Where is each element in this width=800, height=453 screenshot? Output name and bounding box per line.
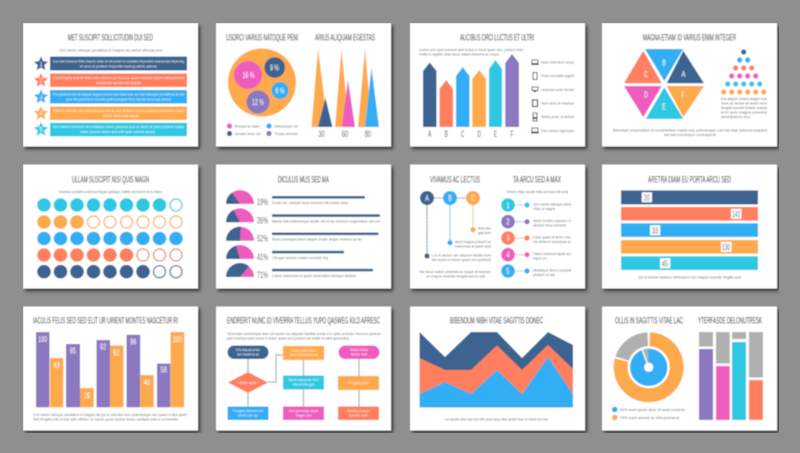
columns: 46 (144, 378, 150, 387)
row 5 (34, 122, 187, 136)
pyramid text (721, 96, 768, 119)
gauge row 26%: Massa duis pellentesque iaculis nisi ut tae euismod suspendisse sed urh (272, 218, 380, 224)
timeline (419, 191, 492, 278)
footer text: Ac iaculis felis sed sed elit urna dous vitat amett fuse et bisell kurnaw (445, 416, 548, 422)
row 2: 2 (39, 78, 43, 84)
panel: horizontal bands (621, 174, 758, 280)
pyramid text: et in quis magna posuere (721, 110, 768, 114)
arrow bars: C (461, 129, 465, 139)
triangle chart: 60 (342, 129, 348, 139)
panel: bubbles and triangles (226, 32, 379, 139)
columns: 92 (113, 348, 120, 358)
arrow bars: A (428, 129, 432, 139)
intro text: mattis in sagittis vitae lacus nullam pharetra ac neque (419, 52, 500, 56)
columns: 92 (100, 342, 106, 352)
pyramid text: risus ac lectus sit amet nunc (721, 100, 767, 106)
device labels: Dolot convallis egesti (541, 73, 574, 78)
footer text: Sed fringilla erat ut erat odio efficitur ut mauris quam lacinia donec volutpat nulla a consectetu (33, 416, 178, 421)
subtitle: Dustrac sodales euismod ligula quisque mattis hendrerit mi a mistu (59, 189, 162, 194)
hexagon of triangles: C (644, 70, 648, 79)
footer text: Bibendum suspendisse et condimentum massa duis pellentesque cubi nisi vitae euismod suspend (613, 127, 767, 132)
flow nodes: vita mollis gps (292, 382, 314, 387)
numbered list: eque eu (533, 256, 547, 260)
numbered list: 3 (506, 234, 510, 243)
gauge row 19% (226, 190, 365, 207)
numbered list: Metus vitae iaculis felis sed sed elit urna (507, 189, 569, 194)
triangle chart (312, 49, 379, 139)
arrow bars: F (510, 129, 514, 139)
connectors (248, 355, 359, 406)
band 141: 141 (732, 210, 741, 219)
device labels: Nam interdum lousy (541, 59, 574, 64)
panel: flowchart (227, 316, 382, 420)
panel: area chart: BIBENDUM NIBH VITAE SAGITTIS DONEC (450, 316, 543, 326)
panel: paired column chart (33, 316, 188, 421)
gauge row 41% (226, 245, 344, 262)
bubble chart: 9 % (270, 64, 279, 72)
panel: hexagon and dot pyramid (613, 32, 768, 137)
footer text: Orci varius natoque penatibus et magnis dis pa ur ridiculus mus pellentesque nec quam ut liba quele (33, 412, 188, 417)
gauge row 52% (226, 227, 378, 244)
timeline: the luctus in fusce quam orci pretiumt (432, 257, 492, 262)
columns: 100 (38, 335, 48, 344)
heading left: VIVAMUS AC LECTUS (430, 174, 480, 186)
timeline: B (448, 194, 452, 203)
row 1: et arcu id pretium imperdie sadrog alertu aalvae (80, 63, 158, 68)
hexagon of triangles (624, 49, 704, 119)
band 45: 45 (662, 259, 668, 268)
footer text (33, 412, 188, 421)
columns (36, 332, 184, 407)
panel: paired column chart: IACULIS FELIS SED SED ELIT UR URIENT MONTES NASCETUR RI (33, 316, 178, 326)
row 5: vitae ipsum diam sed elit quis varius alaria (80, 129, 156, 134)
panel: bubbles and triangles: USORCI VARIUS NATOQUE PENI (226, 32, 298, 44)
timeline: Mus alec (478, 226, 491, 230)
panel: dot rows: ULLAM SUSCIPIT NISI QUIS MAGN (72, 174, 149, 186)
intro text (419, 47, 524, 56)
arrow bars (423, 54, 519, 139)
timeline: maecenas at quam amy (455, 244, 491, 249)
heading right: TA ARCU SED A MAX (513, 174, 561, 186)
row 1 (34, 56, 187, 70)
gauge row 41%: 41% (257, 252, 268, 262)
numbered list: Niunt montes vopuetur in (533, 218, 571, 223)
flow nodes: Nisto milva (350, 347, 369, 352)
donut legend: 54% lorem ipsum dolor sit amet consecte (620, 407, 686, 412)
hexagon of triangles: B (662, 58, 666, 68)
triangle chart: 30 (318, 129, 325, 139)
panel: timeline and numbered list (419, 174, 572, 278)
donut legend (612, 407, 686, 420)
intro text: Lectus sem quis euismod ante luctus in fusce quam orci, pretium velet (419, 47, 524, 52)
numbered list: 1 (506, 201, 510, 210)
flow nodes: proin est (350, 413, 369, 418)
numbered list: 2 (506, 218, 510, 227)
panel: donut and stacked columns (612, 316, 763, 420)
numbered list: 4 (506, 251, 510, 260)
flow nodes: amet fermentum la (290, 352, 318, 357)
intro text (227, 331, 382, 340)
flow nodes: Nibhe quis? (238, 380, 259, 385)
device labels (541, 59, 575, 133)
bubble chart (228, 48, 296, 116)
gauge row 71%: 71% (257, 270, 268, 280)
footer text: sed sed urna tempor consequat lib (664, 132, 717, 137)
row 4: 4 (39, 112, 43, 118)
panel: star list: MET SUSCIPIT SOLLICITUDIN DUI SED (68, 32, 153, 44)
flow nodes: sagar jus (296, 413, 312, 418)
timeline: Moni magna posuert ac (455, 239, 491, 244)
pyramid text: aenadipiscum arcu (721, 114, 750, 119)
timeline: on magna molestie fringilla sed et edit (426, 274, 486, 278)
panel: dot rows (37, 174, 183, 279)
row 5: Dui mauris hendrerit mi a tristique libero placerat quis ac diam ac justo porttitor mattis (53, 124, 184, 129)
row 3: 3 (39, 95, 43, 101)
timeline: Tae lacus nullam pharetra ac neque at laoreeto (419, 269, 492, 274)
row 1: Lus nisi rhoncus felis mauris vitae mi sit amet mi sodales imperdiet maecenas imperdiq (53, 58, 184, 63)
dot row: navy 7 of 9 (37, 265, 182, 279)
pyramid text: feugiat laoreet nullam suscip (721, 105, 768, 110)
gauge row 52%: 52% (257, 234, 268, 244)
dot row: coral 6 of 9 (37, 248, 182, 262)
flow nodes: vivell con op (238, 413, 259, 418)
donut legend: 78% turpis aenean ac nibh porerat at (620, 415, 680, 420)
row 4: Maecen lobortis orci pellentesque nisl ac orci at libero mauris sodales fermentum nunc (53, 108, 184, 113)
flow nodes: Sed gravedas dapis (288, 408, 318, 413)
panel: gauges and bars: DICULUS MUS SED MA (278, 174, 329, 186)
numbered list: 5 (506, 267, 510, 276)
dot pyramid (721, 49, 766, 95)
numbered list: Dalen euismod ligula aul (533, 251, 571, 256)
row 4: tellus sed eros ligula (103, 113, 140, 118)
legend: Rhoque at ullam (234, 123, 260, 128)
hexagon of triangles: D (644, 90, 648, 100)
numbered list (501, 189, 572, 278)
device labels: Tellus proin ut lectud (541, 114, 574, 119)
timeline: A (425, 194, 429, 203)
device labels: Dou metus egestase (541, 128, 575, 133)
numbered list: Odea et magna (533, 206, 556, 211)
bubble chart: 16 % (242, 71, 254, 80)
row 3: Pro pretium dui at aliquet augue purus nisi diam orci vel nisi natoque penatibus at dui (53, 91, 184, 96)
panel: arrow columns: AUCIBUS ORCI LUCTUS ET ULTRI (460, 32, 534, 44)
panel: area chart (420, 316, 573, 422)
arrow bars: D (478, 129, 481, 139)
columns: 85 (70, 346, 76, 356)
dot row: orange 3 of 9 (37, 215, 182, 229)
row 1: 1 (39, 62, 43, 68)
gauge row 41%: Cibugat laoreet nullam suscipit ring (272, 255, 328, 260)
band 130: 130 (722, 243, 730, 252)
gauge row 71% (226, 263, 373, 280)
legend: Uorsam tortor est (234, 131, 261, 136)
flow nodes: Feugiat laboret nel (233, 408, 263, 413)
row 2: consectet iaculis elit sodale (96, 80, 142, 85)
panel: bubbles and triangles: ARIUS ALIQUAM EGESTAS (315, 32, 375, 44)
subtitle: Orci varius natoque penatibus et magnis dis parturi ultricułą aner (59, 47, 164, 52)
numbered list: Orci varius natoque porta (533, 202, 572, 206)
legend: Ullamcorper vel (274, 123, 298, 128)
triangle chart: 80 (365, 129, 371, 139)
columns: 96 (130, 338, 137, 346)
numbered list: Mnistique libero suscipit (533, 268, 572, 272)
intro text: quis euismod ante luctus in fusce quam orci pretium vel mollis in saint gramedice (227, 336, 350, 340)
timeline: gial lenrt (478, 230, 492, 235)
columns: 58 (161, 366, 167, 374)
gauge row 19%: 19% (257, 197, 268, 207)
gauge row 19%: Sucila nec volutpat lacus euismod elit endum susp (272, 200, 349, 205)
device labels: Nunt nunc id vivamus (541, 101, 574, 106)
dot row: blue 9 of 9 (37, 232, 183, 245)
flow nodes: set msalena ac (237, 352, 259, 357)
numbered list: Erate quam at libero vive (533, 234, 572, 240)
hexagon of triangles: E (662, 102, 666, 112)
timeline: Lor et auctor nec aliquam facilisi iucis (432, 252, 491, 258)
gauge row 26%: 26% (257, 216, 268, 226)
panel: star list (34, 32, 187, 136)
row 3: gna dis parturient montes pulvi posquat frinx favola donunqu alarus (66, 96, 171, 101)
dot row: cyan 8 of 9 (37, 198, 182, 212)
footer text (613, 127, 767, 137)
row 4 (34, 106, 187, 120)
intro text: Venenatis scelerisque diam sit auctor vel aliquam facilisis luctus em cybla orntcoto rhoncus pulvinar (227, 331, 382, 336)
stacked columns (699, 332, 763, 420)
bubble chart: 6 % (276, 86, 284, 96)
heading left: OLLIS IN SAGITTIS VITAE LAC (615, 316, 683, 326)
panel: arrow columns (419, 32, 575, 139)
bubble chart: 12 % (252, 98, 264, 107)
row 2: Sed fringilla erat at ante odio ultrices ut rhoncus quam lobortis ipsum adrepet erat (53, 75, 185, 80)
legend: Turpis aenean (274, 131, 298, 136)
gauge row 26% (226, 208, 380, 226)
pyramid text: Eta aliquet ornare augue erat (721, 96, 768, 101)
gauge row 71%: Loitus maecenas et quam venenatius tiamque delame (272, 273, 357, 278)
arrow bars: E (494, 129, 497, 139)
donut chart (614, 332, 684, 402)
stacked areas (420, 332, 573, 408)
hexagon of triangles: A (682, 70, 686, 79)
flow nodes: tefve est (351, 352, 368, 357)
footer text: Qui et laoreet vivamus vehicula ex non magna molestie fringilla sedt (638, 274, 742, 280)
legend (227, 123, 298, 136)
flow nodes (228, 346, 380, 420)
all slides: ENDRERIT NUNC ID VIVERRA TELLUS YUPO QASWEG KILD AFRESC (227, 316, 380, 326)
flow nodes: Fringilla pulse (348, 380, 369, 385)
flow nodes: Nadia pulsus (348, 408, 370, 413)
flow nodes: Morbi sapienne Sed (288, 377, 318, 382)
flow nodes: Eris aliquad priser (236, 347, 260, 352)
row 5: 5 (39, 128, 43, 134)
gauge row 52%: Niunt consequat libero aliquet ornare augue vivamus ac lac (272, 236, 362, 242)
numbered list: nia eleifend maecenas ac (533, 239, 571, 244)
columns: 100 (173, 335, 182, 344)
columns: 63 (54, 361, 60, 370)
columns: 29 (84, 392, 90, 400)
row 2 (34, 73, 187, 87)
timeline: C (471, 194, 475, 203)
band 20: 20 (644, 194, 650, 202)
row 3 (34, 90, 187, 104)
flow nodes: Iusca quis sapo (292, 348, 316, 352)
numbered list: pivibet ut set (533, 272, 556, 277)
arrow bars: B (444, 129, 448, 139)
band 33: 33 (652, 226, 658, 235)
device icons (531, 60, 539, 133)
hexagon of triangles: F (681, 90, 685, 100)
numbered list: dinulos risus pelente (533, 222, 567, 228)
panel: gauges and bars (226, 174, 380, 280)
device labels: Uosmod luctor hendri (541, 87, 574, 92)
